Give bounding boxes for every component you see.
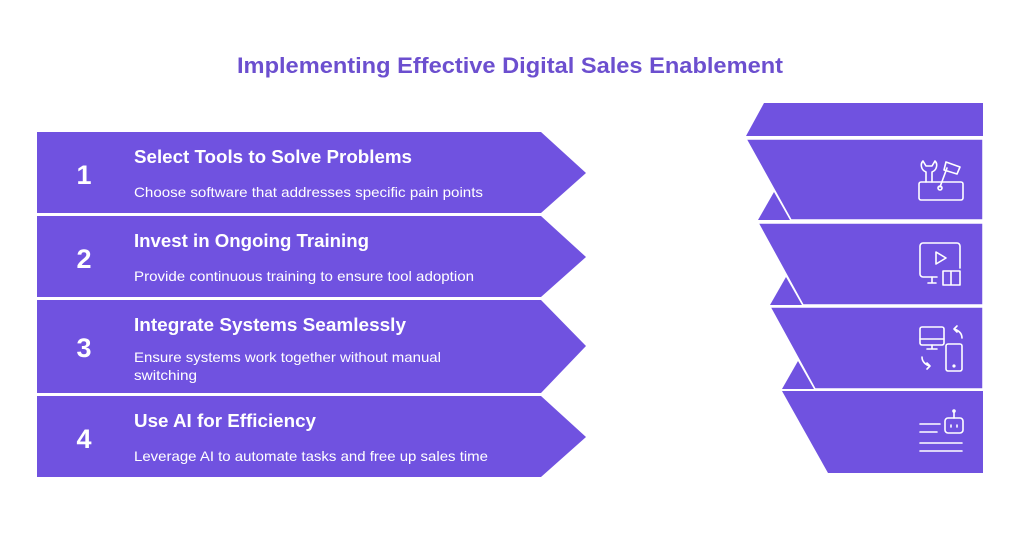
step 4 arrow: Leverage AI to automate tasks and free up sales time: [134, 448, 488, 464]
band 2 with training icon: [758, 223, 983, 305]
step 4 arrow: 4: [76, 424, 92, 454]
step 2 arrow: Invest in Ongoing Training: [134, 231, 369, 251]
step 3 arrow: Integrate Systems Seamlessly: [134, 315, 406, 335]
title: Implementing Effective Digital Sales Enablement: [237, 53, 784, 78]
step 4 arrow: [37, 396, 586, 477]
step 2 arrow: 2: [76, 244, 92, 274]
step 3 arrow: 3: [76, 333, 92, 363]
step 2 arrow: [37, 216, 586, 297]
band 1 with tools icon: [746, 139, 983, 220]
step 1 arrow: Choose software that addresses specific pain points: [134, 184, 483, 200]
step 3 arrow: [37, 300, 586, 393]
step 1 arrow: Select Tools to Solve Problems: [134, 147, 412, 167]
step 1 arrow: [37, 132, 586, 213]
step 3 arrow: Ensure systems work together without manual: [134, 349, 441, 365]
band 3 with sync devices icon: [770, 307, 983, 389]
step 1 arrow: 1: [76, 160, 92, 190]
step 4 arrow: Use AI for Efficiency: [134, 411, 316, 431]
step 2 arrow: Provide continuous training to ensure tool adoption: [134, 268, 474, 284]
step 3 arrow: switching: [134, 367, 197, 383]
right stack: [746, 103, 983, 473]
band 4 with AI icon: [782, 391, 983, 473]
